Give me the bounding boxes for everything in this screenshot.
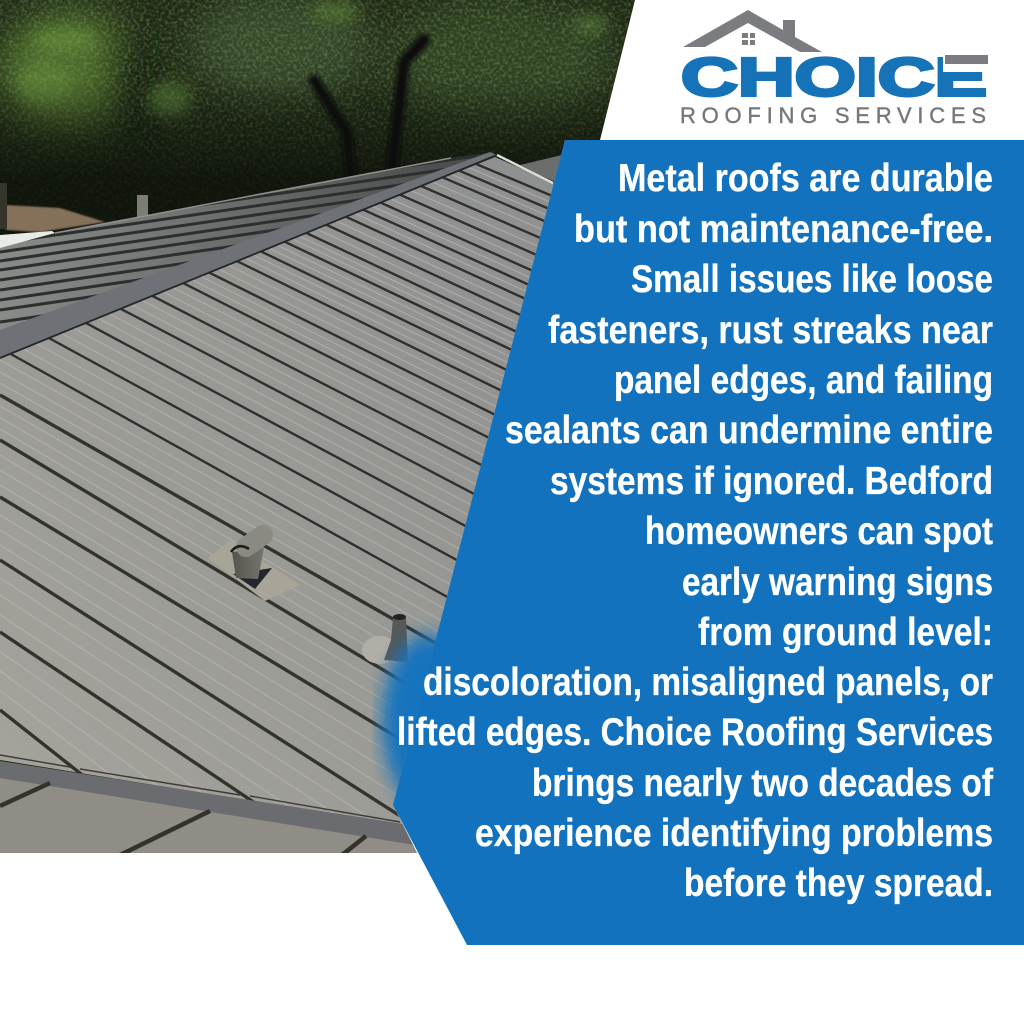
white ground strip bbox=[0, 231, 55, 248]
far roof section bbox=[0, 152, 500, 337]
blue glow over photo bbox=[372, 622, 440, 804]
vent two bbox=[362, 614, 408, 664]
logo window bbox=[742, 33, 755, 45]
blue text panel bbox=[393, 140, 1024, 945]
body text bbox=[397, 157, 994, 905]
far vent pipe bbox=[137, 195, 148, 218]
vent one bbox=[208, 535, 300, 601]
lower tree shadow bbox=[0, 86, 610, 235]
logo bbox=[680, 10, 993, 128]
white roof edge bbox=[497, 155, 553, 183]
main roof panels bbox=[0, 157, 554, 825]
logo house roof bbox=[683, 10, 822, 52]
trees background bbox=[0, 0, 634, 235]
logo E top mask bbox=[943, 50, 993, 72]
lower seams bbox=[0, 783, 366, 855]
post bbox=[0, 183, 7, 229]
eave flashing band bbox=[0, 761, 415, 845]
right far roof bbox=[520, 155, 562, 182]
ground patch bbox=[6, 205, 105, 232]
roof seams bbox=[10, 164, 551, 598]
tree trunks bbox=[314, 40, 424, 177]
roof ribs bbox=[0, 168, 549, 819]
leaf texture bbox=[0, 0, 634, 230]
roof photograph bbox=[0, 0, 640, 860]
logo wordmark: CHOICE bbox=[681, 48, 987, 108]
logo E top bar bbox=[945, 55, 988, 64]
ridge cap bbox=[0, 152, 497, 358]
lower roof section bbox=[0, 772, 420, 853]
logo tagline: ROOFING SERVICES bbox=[680, 103, 986, 128]
